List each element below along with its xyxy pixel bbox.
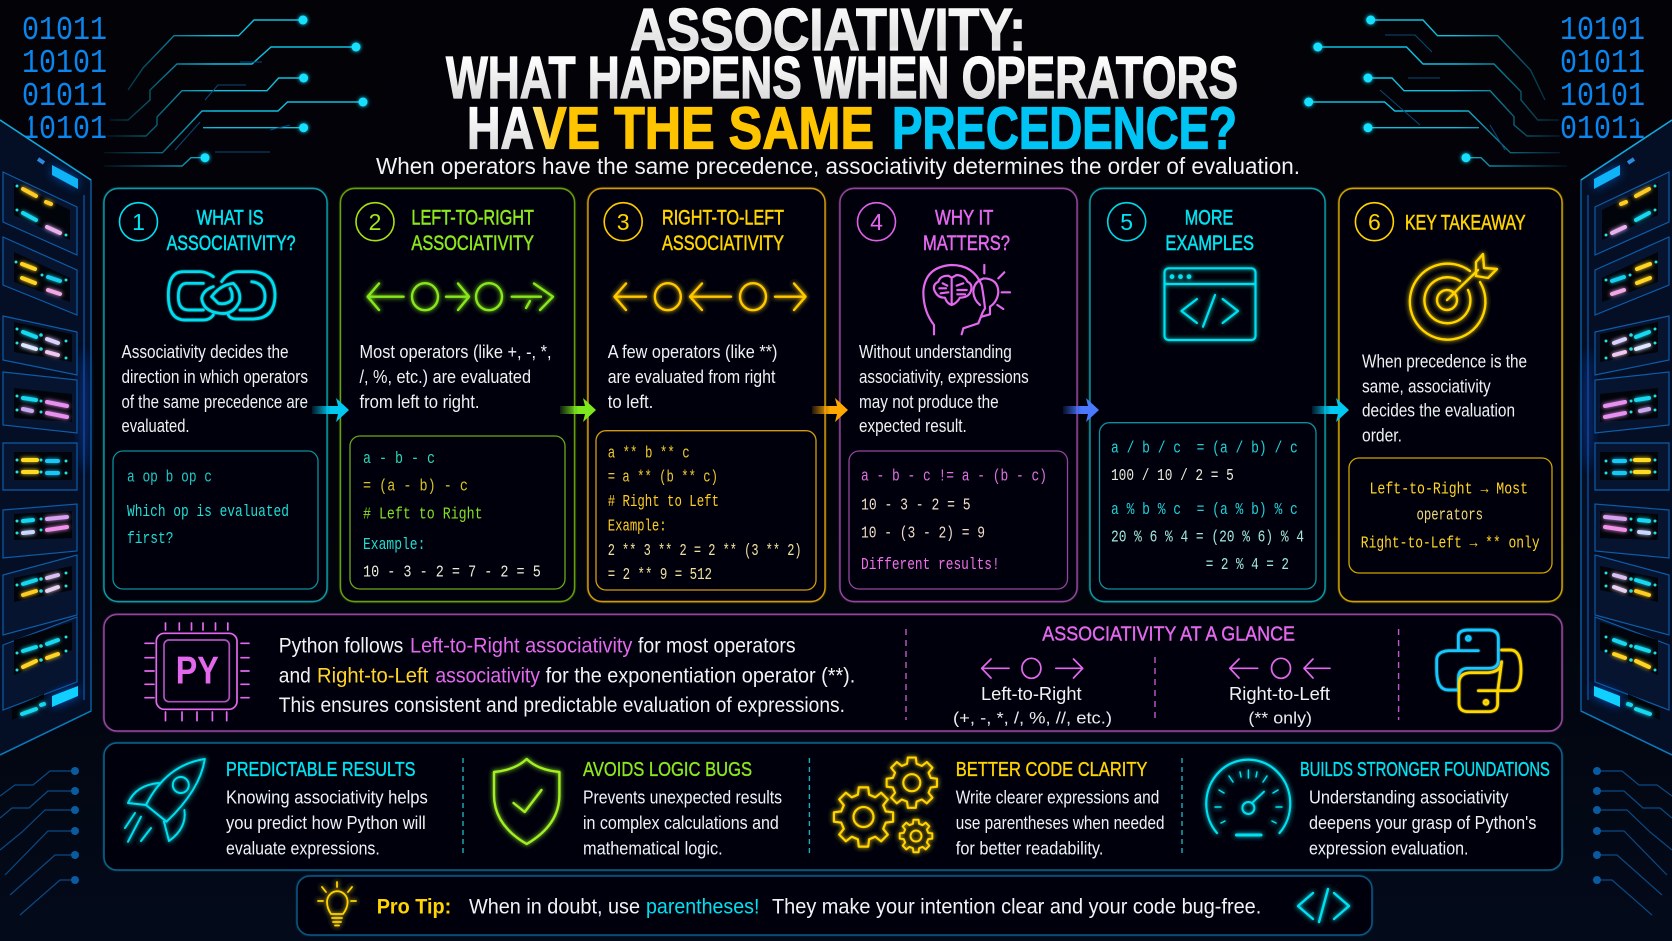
binary digits left: 10101 (22, 45, 107, 82)
body text 3: A few operators (like **) (608, 342, 777, 362)
heading 3 (662, 206, 784, 255)
heading 4: WHY IT (935, 206, 993, 230)
body text 4: associativity, expressions (859, 367, 1029, 387)
python summary text: Left-to-Right associativity (410, 634, 633, 658)
benefit: predictable results: you predict how Python will (226, 813, 426, 833)
circuit traces top right (1304, 16, 1567, 166)
body text 3 (608, 342, 777, 412)
code box 5: a % b % c = (a % b) % c (1111, 501, 1298, 520)
heading 6: KEY TAKEAWAY (1405, 210, 1526, 234)
server rack left (0, 120, 91, 915)
title: VE THE SAME (533, 96, 874, 162)
right-to-left glance label: (** only) (1248, 708, 1312, 727)
heading 3: RIGHT-TO-LEFT (662, 206, 784, 230)
benefit: better code clarity: BETTER CODE CLARITY (956, 758, 1148, 781)
body text 1: evaluated. (122, 416, 190, 436)
heading 1: WHAT IS (197, 206, 264, 230)
arrow: step 2 to 3 (560, 398, 596, 422)
python summary text: Python follows (279, 634, 403, 658)
server rack right (1581, 120, 1672, 915)
code box 1: Which op is evaluated (127, 503, 289, 522)
number badge 3 (604, 203, 642, 241)
panel: 3 right-to-left (588, 188, 825, 602)
body text 1: of the same precedence are (122, 392, 308, 412)
benefit: better code clarity: use parentheses when needed (956, 813, 1164, 833)
python summary text: associativity (435, 663, 540, 687)
body text 4 (859, 342, 1029, 436)
number badge 4: 4 (870, 209, 883, 235)
benefit: avoids logic bugs: in complex calculations and (583, 813, 779, 833)
icon: PY chip: PY (176, 649, 219, 692)
pro tip text: Pro Tip: (377, 894, 451, 918)
benefit: predictable results: evaluate expressions. (226, 838, 380, 858)
body text 6: same, associativity (1362, 376, 1491, 396)
code box 3: = a ** (b ** c) (608, 469, 718, 488)
benefit: avoids logic bugs (583, 758, 782, 858)
benefit: stronger foundations: BUILDS STRONGER FOUNDATIONS (1300, 758, 1550, 781)
panel: benefits (104, 743, 1562, 870)
heading 2: ASSOCIATIVITY (411, 231, 534, 255)
icon: left-to-right glance (982, 658, 1083, 678)
code box 5: 20 % 6 % 4 = (20 % 6) % 4 (1111, 529, 1304, 548)
heading 5: MORE (1185, 206, 1233, 230)
heading 4: MATTERS? (923, 231, 1010, 255)
pro tip text: They make your intention clear and your code bug-free. (772, 894, 1261, 918)
code box 3: 2 ** 3 ** 2 = 2 ** (3 ** 2) (608, 542, 802, 561)
panel: 5 more examples (1090, 188, 1325, 602)
title (446, 0, 1238, 162)
number badge 5: 5 (1120, 209, 1133, 235)
benefit: better code clarity (956, 758, 1164, 858)
code box 2: 10 - 3 - 2 = 7 - 2 = 5 (363, 564, 541, 583)
python summary text: This ensures consistent and predictable evaluation of expressions. (279, 693, 845, 717)
number badge 4 (858, 203, 896, 241)
python summary text: and (279, 663, 311, 687)
code box 1: first? (127, 530, 174, 549)
left-to-right glance label: Left-to-Right (981, 683, 1082, 704)
heading 5: EXAMPLES (1165, 231, 1254, 255)
binary digits right: 10101 (1560, 12, 1645, 49)
code box 6: Right-to-Left → ** only (1361, 534, 1540, 553)
icon: chain link (168, 272, 275, 320)
benefit: stronger foundations: Understanding associativity (1309, 787, 1508, 807)
code box 2: # Left to Right (363, 505, 483, 524)
heading 2: LEFT-TO-RIGHT (411, 206, 534, 230)
code box 3: Example: (608, 518, 667, 537)
arrow: step 3 to 4 (812, 398, 848, 422)
code box 2: = (a - b) - c (363, 478, 468, 497)
code box 2: Example: (363, 536, 425, 555)
title: PRECEDENCE? (892, 96, 1237, 162)
python summary text (279, 634, 855, 717)
number badge 2: 2 (369, 209, 381, 235)
body text 3: are evaluated from right (608, 367, 775, 387)
icon: gears (834, 758, 937, 852)
icon: code window (1164, 268, 1256, 340)
title: HA (467, 96, 534, 162)
arrow: step 1 to 2 (312, 398, 349, 422)
icon: target with arrow (1410, 254, 1497, 340)
icon: PY chip (145, 623, 249, 721)
number badge 1: 1 (132, 209, 145, 235)
body text 2 (360, 342, 552, 412)
binary digits left (18, 12, 107, 148)
body text 3: to left. (608, 392, 653, 412)
arrow: step 5 to 6 (1312, 398, 1349, 422)
panel: 2 left-to-right (340, 188, 574, 602)
body text 1: Associativity decides the (122, 342, 288, 362)
body text 2: from left to right. (360, 392, 480, 412)
code box 1: a op b op c (127, 469, 212, 488)
benefit: better code clarity: for better readability. (956, 838, 1103, 858)
heading 1 (167, 206, 296, 255)
right-to-left glance label (1229, 683, 1330, 727)
body text 4: Without understanding (859, 342, 1012, 362)
icon: head with brain and bulb (923, 265, 1010, 334)
body text 1: direction in which operators (122, 367, 308, 387)
icon: code brackets (1298, 889, 1349, 922)
benefit: avoids logic bugs: mathematical logic. (583, 838, 723, 858)
arrow: step 4 to 5 (1063, 398, 1099, 422)
icon: left-to-right arrows (368, 283, 553, 310)
body text 4: expected result. (859, 416, 967, 436)
number badge 1 (120, 203, 158, 241)
binary digits right: 10101 (1560, 78, 1645, 115)
body text 2: /, %, etc.) are evaluated (360, 367, 531, 387)
body text 6: order. (1362, 426, 1402, 446)
icon: right-to-left glance (1230, 658, 1330, 678)
subtitle: When operators have the same precedence, associativity determines the order of evaluation. (376, 153, 1300, 179)
body text 6: When precedence is the (1362, 351, 1527, 371)
icon: shield (494, 759, 559, 844)
code box 3: = 2 ** 9 = 512 (608, 566, 712, 585)
code box 3: # Right to Left (608, 493, 719, 512)
python summary text: for most operators (638, 634, 796, 658)
binary digits left: 01011 (22, 78, 107, 115)
panel: python summary (104, 614, 1562, 731)
code box 4: a - b - c != a - (b - c) (861, 468, 1047, 487)
benefit: better code clarity: Write clearer expressions and (956, 787, 1159, 807)
number badge 6: 6 (1368, 209, 1381, 235)
benefit: predictable results (226, 758, 428, 858)
code box 3 (596, 431, 816, 590)
pro tip text (377, 894, 1261, 918)
pro tip text: When in doubt, use (469, 894, 640, 918)
left-to-right glance label (953, 683, 1112, 727)
panel: pro tip (297, 876, 1372, 935)
title: WHAT HAPPENS WHEN OPERATORS (446, 45, 1238, 111)
heading 1: ASSOCIATIVITY? (167, 231, 296, 255)
code box 2: a - b - c (363, 450, 435, 469)
code box 4: 10 - 3 - 2 = 5 (861, 496, 971, 515)
body text 1 (122, 342, 308, 436)
icon: python logo (1437, 630, 1521, 712)
left-to-right glance label: (+, -, *, /, %, //, etc.) (953, 708, 1112, 727)
code box 5: a / b / c = (a / b) / c (1111, 440, 1298, 459)
binary digits left: 01011 (22, 12, 107, 49)
panel: 4 why it matters (840, 188, 1077, 602)
body text 6 (1362, 351, 1527, 446)
glance heading: ASSOCIATIVITY AT A GLANCE (1042, 622, 1295, 645)
panel: 6 key takeaway (1339, 188, 1562, 602)
heading 2 (411, 206, 534, 255)
icon: light bulb (318, 882, 356, 926)
panel: 1 what is associativity (104, 188, 327, 602)
binary digits right: 01011 (1560, 111, 1645, 148)
right-to-left glance label: Right-to-Left (1229, 683, 1330, 704)
benefit: predictable results: Knowing associativity helps (226, 787, 428, 807)
icon: rocket (125, 759, 205, 842)
code box 6: operators (1416, 506, 1483, 525)
benefit: predictable results: PREDICTABLE RESULTS (226, 758, 416, 781)
benefit: stronger foundations: deepens your grasp of Python's (1309, 813, 1536, 833)
code box 5: = 2 % 4 = 2 (1206, 556, 1289, 575)
body text 2: Most operators (like +, -, *, (360, 342, 552, 362)
benefit: stronger foundations (1300, 758, 1550, 858)
code box 3: a ** b ** c (608, 444, 690, 463)
code box 1 (113, 451, 318, 589)
code box 4: 10 - (3 - 2) = 9 (861, 524, 985, 543)
binary digits left: 10101 (22, 111, 107, 148)
circuit traces top left (104, 16, 368, 166)
python summary text: for the exponentiation operator (**). (546, 663, 855, 687)
number badge 5 (1108, 203, 1146, 241)
body text 6: decides the evaluation (1362, 401, 1515, 421)
code box 5: 100 / 10 / 2 = 5 (1111, 467, 1234, 486)
python summary text: Right-to-Left (317, 663, 428, 687)
benefit: stronger foundations: expression evaluation. (1309, 838, 1468, 858)
icon: right-to-left arrows (614, 283, 806, 310)
benefit: avoids logic bugs: AVOIDS LOGIC BUGS (583, 758, 752, 781)
heading 4 (923, 206, 1010, 255)
code box 6: Left-to-Right → Most (1370, 480, 1528, 499)
code box 5 (1100, 423, 1316, 589)
binary digits right (1560, 12, 1648, 148)
binary digits right: 01011 (1560, 45, 1645, 82)
number badge 6 (1355, 203, 1393, 241)
code box 4 (849, 451, 1068, 589)
code box 4: Different results! (861, 556, 1000, 575)
number badge 2 (356, 203, 394, 241)
pro tip text: parentheses! (646, 894, 759, 918)
number badge 3: 3 (617, 209, 630, 235)
body text 4: may not produce the (859, 392, 999, 412)
code box 2 (350, 436, 565, 589)
code box 6 (1349, 458, 1552, 573)
heading 3: ASSOCIATIVITY (662, 231, 784, 255)
heading 5 (1165, 206, 1254, 255)
benefit: avoids logic bugs: Prevents unexpected results (583, 787, 782, 807)
icon: gauge (1206, 760, 1290, 835)
